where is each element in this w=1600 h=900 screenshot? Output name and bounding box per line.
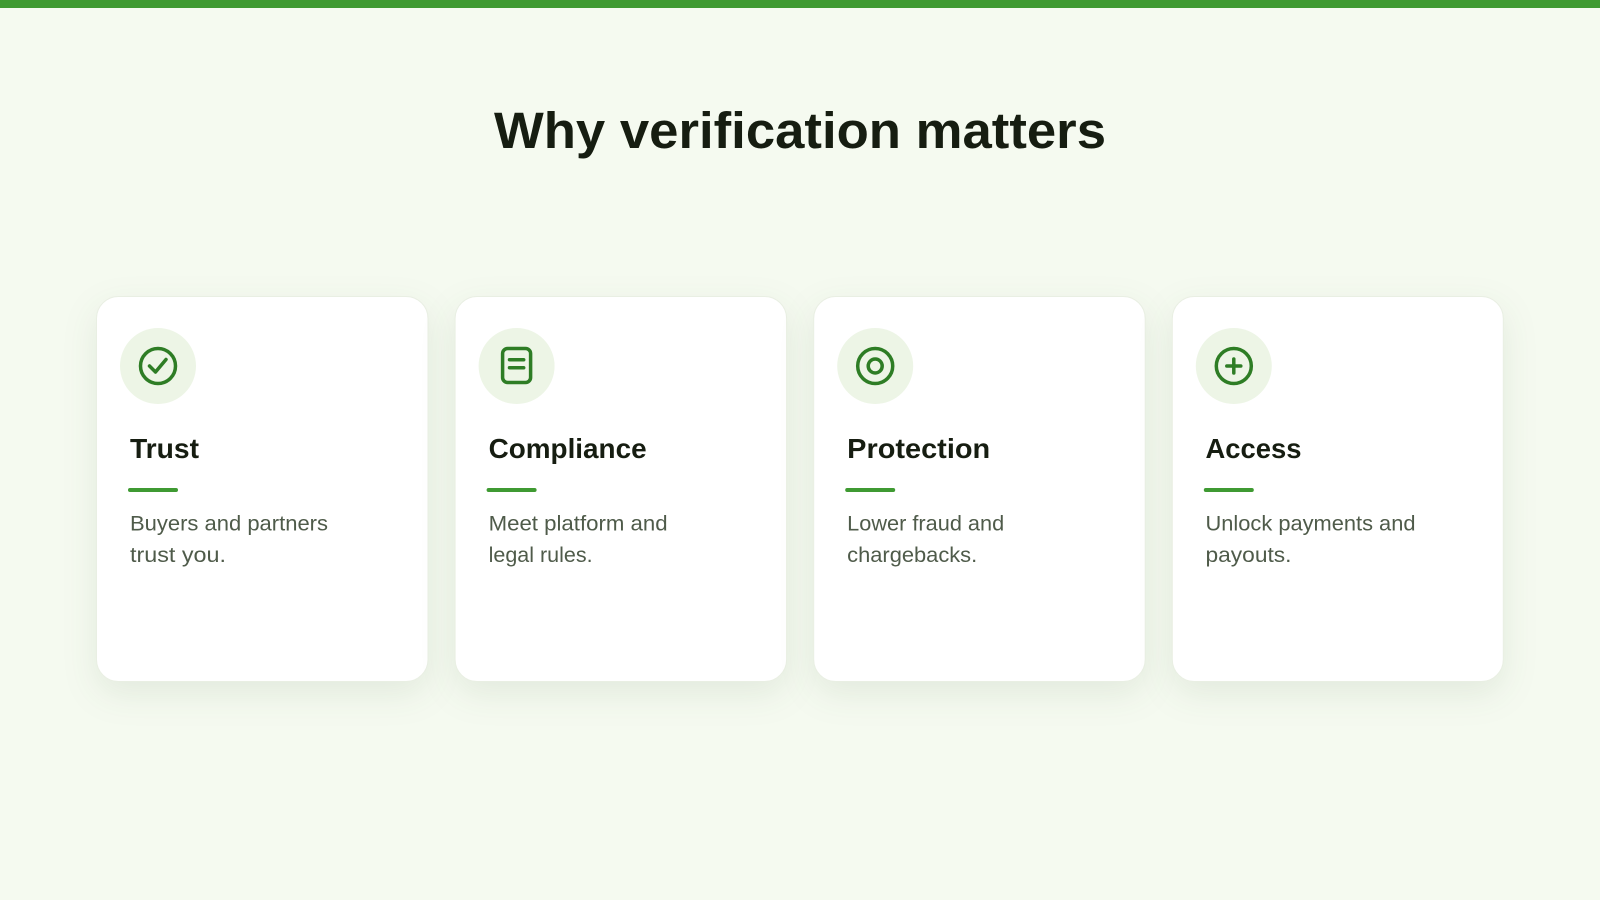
panel: protection: [814, 296, 1145, 682]
heading: protection: Protection: [847, 433, 990, 464]
icon: check circle: [120, 328, 196, 404]
card background: compliance: [455, 296, 787, 682]
title: Why verification matters: [494, 102, 1106, 159]
panel: access: [1172, 296, 1503, 682]
heading: access: Access: [1206, 433, 1302, 464]
card background: protection: [814, 296, 1145, 682]
panel: trust: [96, 296, 428, 682]
text: trust description: Buyers and partners: [130, 512, 328, 536]
heading: trust: Trust: [130, 433, 199, 464]
text: access description: payouts.: [1206, 544, 1292, 567]
top accent bar: [0, 0, 1600, 8]
accent rule: compliance: [487, 488, 537, 492]
text: protection description: Lower fraud and: [847, 512, 1004, 536]
text: trust description: trust you.: [130, 544, 226, 567]
heading: compliance: Compliance: [489, 433, 647, 464]
text: compliance description: [489, 512, 668, 567]
icon: target rings: [837, 328, 913, 404]
panel: compliance: [455, 296, 787, 682]
text: trust description: [130, 512, 328, 567]
text: protection description: chargebacks.: [847, 544, 977, 567]
text: access description: [1206, 512, 1416, 567]
text: compliance description: legal rules.: [489, 544, 593, 567]
icon: plus circle: [1196, 328, 1272, 404]
accent rule: protection: [845, 488, 895, 492]
text: protection description: [847, 512, 1004, 567]
accent rule: trust: [128, 488, 178, 492]
icon: document: [479, 328, 555, 404]
text: compliance description: Meet platform and: [489, 512, 668, 536]
card background: trust: [96, 296, 428, 682]
text: access description: Unlock payments and: [1206, 512, 1416, 536]
accent rule: access: [1204, 488, 1254, 492]
card background: access: [1172, 296, 1503, 682]
